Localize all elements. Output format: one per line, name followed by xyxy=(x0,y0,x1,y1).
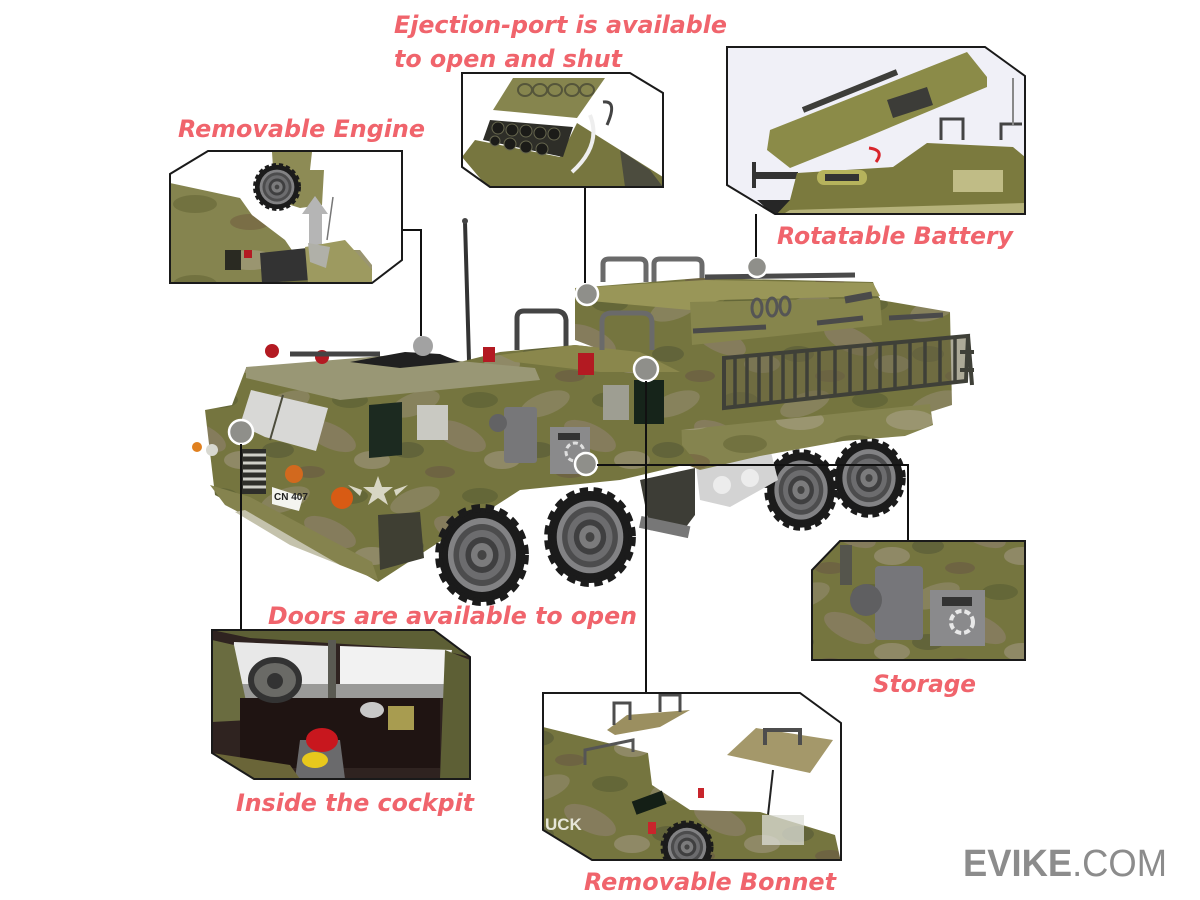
label: inside the cockpit: Inside the cockpit xyxy=(236,789,476,817)
side fence xyxy=(724,335,974,408)
icon: rotation arrow xyxy=(869,148,879,162)
cargo lower rail xyxy=(680,404,933,470)
cab and engine body xyxy=(205,345,696,582)
panel: removable engine xyxy=(170,151,402,283)
windshield xyxy=(240,390,328,451)
icon: upward arrow xyxy=(302,196,328,245)
panel: inside the cockpit xyxy=(212,630,470,779)
grey cylinder xyxy=(489,407,537,463)
cab roof xyxy=(246,355,540,400)
panel: ejection port xyxy=(462,73,663,190)
rocket tubes detail xyxy=(752,297,790,317)
front wheels xyxy=(439,491,632,602)
label: rotatable battery: Rotatable Battery xyxy=(777,222,1014,250)
antenna xyxy=(462,218,477,423)
cab door handle xyxy=(602,313,652,350)
label: ejection port line 2: to open and shut xyxy=(394,45,624,73)
floating bonnet left xyxy=(607,710,690,735)
front grille and lights: CN 407 xyxy=(274,492,308,503)
connector lines xyxy=(241,187,908,693)
icon: steering wheel xyxy=(251,660,299,700)
label: removable bonnet: Removable Bonnet xyxy=(584,868,838,896)
chassis white drive parts xyxy=(639,448,778,538)
cargo upper box xyxy=(575,278,952,435)
top handles on cargo box xyxy=(517,259,702,350)
cargo crate panel xyxy=(690,298,882,345)
rear wheels xyxy=(767,441,903,528)
label: removable engine: Removable Engine xyxy=(178,115,425,143)
label: storage: Storage xyxy=(873,670,976,698)
front grille and lights xyxy=(192,442,353,511)
bumper xyxy=(210,485,378,580)
label: doors: Doors are available to open xyxy=(268,602,637,630)
label: ejection port: Ejection-port is available xyxy=(394,11,727,39)
grey storage box xyxy=(550,427,590,474)
bonnet roof lights xyxy=(265,344,594,375)
side windows xyxy=(369,380,664,458)
main truck xyxy=(192,218,974,602)
star emblem xyxy=(348,476,408,505)
floating bonnet right xyxy=(727,728,833,773)
icon: spare wheel xyxy=(255,165,299,209)
watermark: EVIKE.COM xyxy=(963,843,1167,885)
fender step xyxy=(378,512,424,570)
panel: rotatable battery xyxy=(727,47,1025,216)
roof rails on cargo box xyxy=(693,275,943,331)
panel: removable bonnet: UCK xyxy=(545,815,583,834)
panel: storage detail xyxy=(812,541,1025,660)
callout markers xyxy=(229,257,767,475)
panel: removable bonnet xyxy=(543,693,841,871)
